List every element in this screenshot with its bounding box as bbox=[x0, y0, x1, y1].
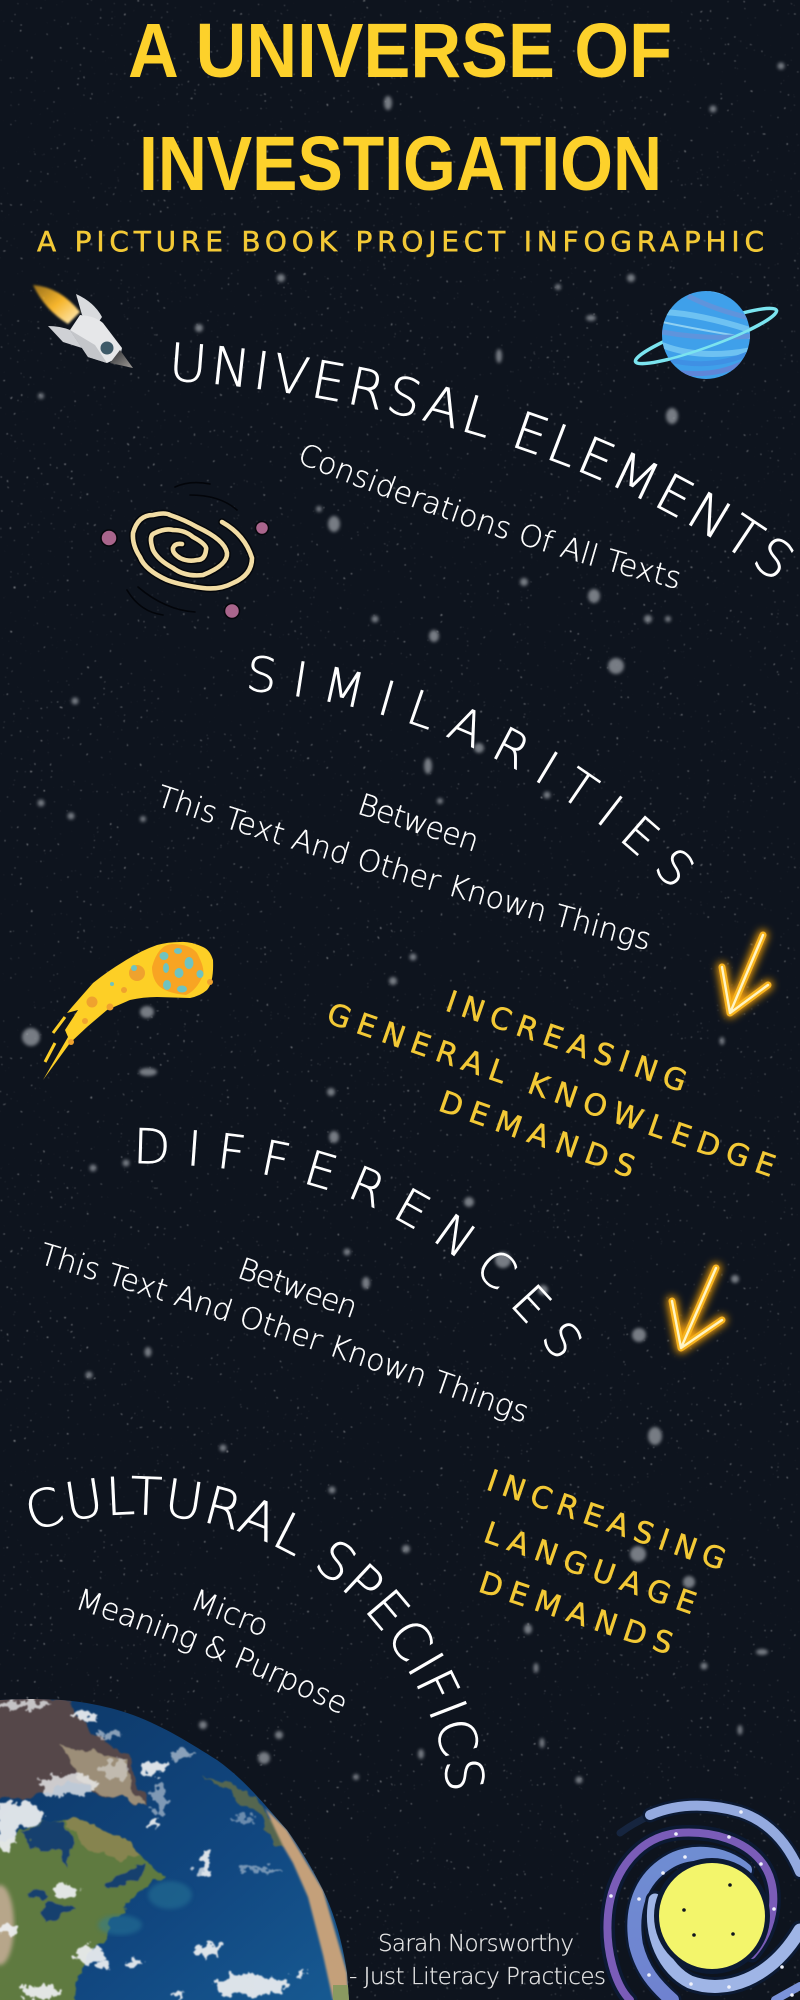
icon: neon arrow 2 bbox=[672, 1268, 722, 1348]
east coast desert bbox=[265, 1808, 349, 2000]
west land edge bbox=[0, 1885, 14, 1965]
text: this text and other known things: This Text And Other Known Things bbox=[162, 784, 650, 950]
land masses bbox=[0, 1695, 287, 2000]
text: author credit: Sarah Norsworthy bbox=[378, 1931, 574, 1957]
callout: increasing language demands: DEMANDS bbox=[480, 1570, 673, 1653]
icon: ringed planet bbox=[634, 291, 778, 379]
title: INVESTIGATION bbox=[139, 121, 662, 207]
icon: rocket bbox=[33, 285, 133, 368]
callout: increasing general knowledge demands: DEMANDS bbox=[440, 1090, 635, 1176]
shallow sea bbox=[148, 1881, 192, 1909]
subtitle: A PICTURE BOOK PROJECT INFOGRAPHIC bbox=[37, 225, 764, 258]
title: A UNIVERSE OF bbox=[128, 8, 672, 94]
heading: differences: DIFFERENCES bbox=[138, 1128, 582, 1356]
callout: increasing language demands: INCREASING bbox=[488, 1469, 726, 1568]
text: author credit bbox=[349, 1931, 606, 1990]
heading: universal elements: UNIVERSAL ELEMENTS bbox=[174, 342, 794, 577]
heading: similarities: SIMILARITIES bbox=[249, 656, 694, 885]
text: considerations of all texts: Considerations Of All Texts bbox=[301, 445, 680, 588]
text: between: Between bbox=[239, 1257, 354, 1318]
text: meaning and purpose: Meaning & Purpose bbox=[78, 1588, 344, 1713]
text: micro: Micro bbox=[193, 1589, 266, 1635]
icon: comet bbox=[43, 942, 213, 1080]
icon: swirling galaxy moon bbox=[607, 1806, 800, 2000]
callout: increasing general knowledge demands: INCREASING bbox=[446, 990, 686, 1090]
text: between: Between bbox=[359, 793, 476, 852]
callout: increasing general knowledge demands: GENERAL KNOWLEDGE bbox=[329, 1004, 776, 1177]
text: author credit: - Just Literacy Practices bbox=[349, 1964, 606, 1990]
title bbox=[128, 8, 672, 207]
clouds bbox=[0, 1700, 308, 2000]
callout: increasing language demands bbox=[480, 1469, 726, 1653]
icon: neon arrow 1 bbox=[722, 935, 768, 1013]
heading: cultural specifics: CULTURAL SPECIFICS bbox=[28, 1476, 485, 1788]
icon: earth bbox=[0, 1695, 350, 2000]
text: this text and other known things: This Text And Other Known Things bbox=[44, 1242, 527, 1422]
callout: increasing language demands: LANGUAGE bbox=[484, 1521, 697, 1614]
icon: spiral galaxy bbox=[101, 483, 268, 618]
